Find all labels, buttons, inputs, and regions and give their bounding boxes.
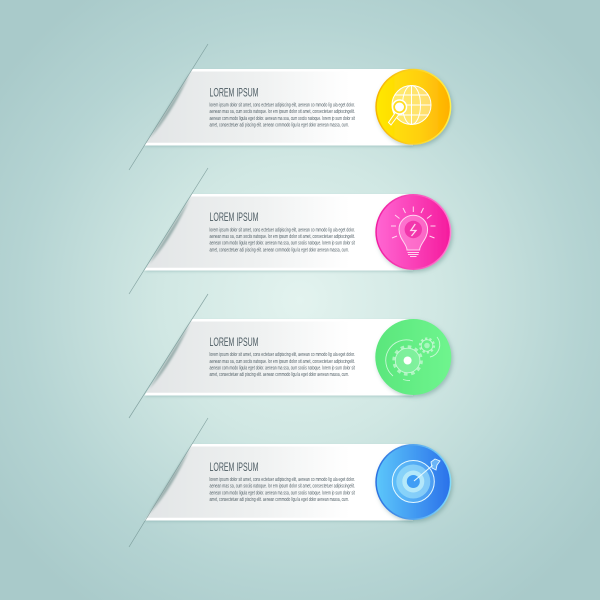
text block: aenean mas sa, cum sociis natoque. lor em ipsum dolor sit amet, consectetuer adipiscingelit. [210,109,355,115]
text block: lorem ipsum dolor sit amet, cons ectetuer adipiscing elit, aenean co mmodo lig ula eget dolor. [210,352,355,358]
panel: row 2 [129,168,451,294]
text block: aenean mas sa, cum sociis natoque. lor em ipsum dolor sit amet, consectetuer adipiscingelit. [210,234,355,240]
cut shadow [129,168,208,294]
icon: light bulb [391,206,436,256]
text block: aenean com modo ligula eget dolor. aenean ma ssa, cum sociis natoque. lorem ip sum dolor sit [210,366,355,372]
text block: lorem ipsum dolor sit amet, cons ectetuer adipiscing elit, aenean co mmodo lig ula eget dolor. [210,227,355,233]
text block: amet, consectetuer adi piscing elit. aenean commodo ligu la eget dolor aenean massa, cum. [210,497,349,503]
yellow circle [375,69,451,145]
text block: aenean mas sa, cum sociis natoque. lor em ipsum dolor sit amet, consectetuer adipiscingelit. [210,359,355,365]
banner [144,444,413,520]
text block: amet, consectetuer adi piscing elit. aenean commodo ligu la eget dolor aenean massa, cum. [210,122,349,128]
icon: gears [386,337,440,381]
banner edges [144,444,400,520]
text block: aenean com modo ligula eget dolor. aenean ma ssa, cum sociis natoque. lorem ip sum dolor sit [210,116,355,122]
text block: lorem ipsum dolor sit amet, cons ectetuer adipiscing elit, aenean co mmodo lig ula eget dolor. [210,477,355,483]
panel: row 3 [129,294,451,418]
panel: row 1 [129,44,451,170]
text block [210,477,355,503]
text block: amet, consectetuer adi piscing elit. aenean commodo ligu la eget dolor aenean massa, cum. [210,247,349,253]
banner [144,194,413,270]
blue circle [375,444,451,520]
banner [144,69,413,146]
banner [144,319,413,396]
text block: lorem ipsum dolor sit amet, cons ectetuer adipiscing elit, aenean co mmodo lig ula eget dolor. [210,103,355,109]
text block: aenean com modo ligula eget dolor. aenean ma ssa, cum sociis natoque. lorem ip sum dolor sit [210,490,355,496]
text block: amet, consectetuer adi piscing elit. aenean commodo ligu la eget dolor aenean massa, cum. [210,372,349,378]
text block [210,352,355,378]
cut shadow [129,44,208,170]
heading: LOREM IPSUM [210,460,258,474]
heading: LOREM IPSUM [210,335,258,349]
pink circle [375,194,451,270]
heading: LOREM IPSUM [210,210,258,224]
heading: LOREM IPSUM [210,85,258,99]
text block: aenean com modo ligula eget dolor. aenean ma ssa, cum sociis natoque. lorem ip sum dolor sit [210,241,355,247]
icon: globe with magnifier [388,86,431,125]
banner edges [144,319,400,396]
text block [210,103,355,128]
banner edges [144,69,400,146]
text block [210,227,355,253]
banner edges [144,194,400,270]
green circle [375,319,451,395]
panel: row 4 [129,418,451,547]
text block: aenean mas sa, cum sociis natoque. lor em ipsum dolor sit amet, consectetuer adipiscingelit. [210,484,355,490]
icon: target with arrow [392,459,440,502]
cut shadow [129,418,208,547]
cut shadow [129,294,208,418]
